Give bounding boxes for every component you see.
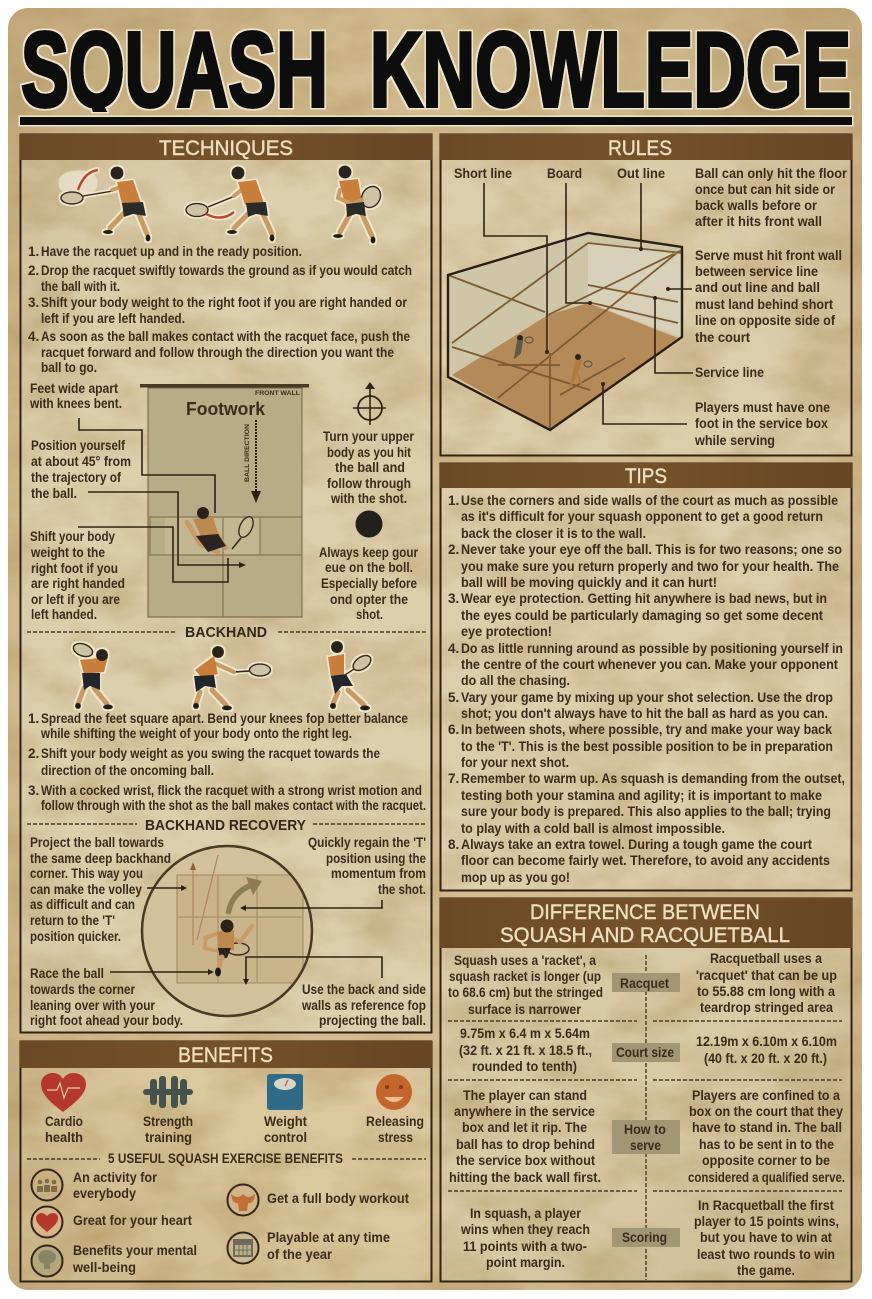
row: racquet: to 68.6 cm) but the stringed — [448, 985, 603, 1000]
row: how to serve: anywhere in the service — [454, 1104, 595, 1119]
text: tips list: you make sure you return properly and two for your health. The — [461, 559, 839, 574]
text: tips list: Do as little running around as possible by positioning yourself in — [461, 641, 843, 656]
row: scoring: 11 points with a two- — [463, 1239, 587, 1254]
text: tips list: Always take an extra towel. During a tough game the court — [461, 837, 812, 852]
row: how to serve: considered a qualified serve. — [688, 1170, 845, 1185]
text: turn upper body: the ball and — [335, 460, 405, 475]
heading: backhand: BACKHAND — [185, 625, 267, 641]
panel: rules — [440, 134, 852, 456]
heading: techniques — [20, 134, 432, 160]
text: rules descriptions: after it hits front wall — [695, 214, 822, 229]
row: scoring: wins when they reach — [460, 1222, 590, 1237]
row: how to serve — [449, 1088, 845, 1185]
row: racquet: 'racquet' that can be up — [696, 968, 837, 983]
text: rules descriptions: the court — [695, 330, 750, 345]
icon: smiling face — [376, 1074, 412, 1110]
panel: difference between squash and racquetball — [440, 898, 852, 1282]
row: court size: rounded to tenth) — [472, 1059, 577, 1074]
text: tips list: Vary your game by mixing up your shot selection. Use the drop — [461, 690, 833, 705]
text: rules descriptions: Service line — [695, 365, 764, 380]
text: tips list: 6. — [448, 722, 459, 737]
figure: backhand step 2 — [193, 646, 270, 710]
row: how to serve: Players are confined to a — [692, 1088, 840, 1103]
text: backhand steps: while shifting the weight of your body onto the right leg. — [40, 726, 352, 741]
heading: benefits — [20, 1041, 432, 1068]
heading: backhand recovery: BACKHAND RECOVERY — [145, 818, 306, 834]
text: keep eye on ball — [319, 545, 419, 622]
text: backhand steps: 1. — [28, 711, 39, 726]
text: footwork left labels: or left if you are — [31, 592, 120, 607]
text: forehand steps — [28, 244, 412, 375]
text: recovery labels: can make the volley — [30, 882, 142, 897]
text: turn upper body — [323, 429, 415, 506]
text: backhand steps: Shift your body weight as you swing the racquet towards the — [41, 746, 380, 761]
figure: backhand step 1 — [72, 641, 113, 710]
text: forehand steps: 3. — [28, 295, 39, 310]
text: forehand steps: racquet forward and follow through the direction you want the — [41, 345, 394, 360]
heading: benefits: BENEFITS — [178, 1044, 273, 1067]
figure: forehand step 2 — [186, 166, 274, 242]
text: footwork left labels: Position yourself — [31, 438, 125, 453]
text: forehand steps: ball to go. — [41, 360, 97, 375]
text: court labels: Board — [547, 166, 582, 181]
text: forehand steps: 4. — [28, 329, 39, 344]
row: scoring: the game. — [737, 1263, 795, 1278]
row: court size: (40 ft. x 20 ft. x 20 ft.) — [704, 1051, 827, 1066]
text: tips list: ball will be moving quickly and it can hurt! — [461, 575, 717, 590]
text: tips list — [448, 493, 845, 885]
text: tips list: as it's difficult for your squash opponent to get a good return — [461, 509, 823, 524]
icon: small heart — [32, 1206, 62, 1238]
text: recovery labels: position quicker. — [30, 929, 121, 944]
text: forehand steps: Shift your body weight to the right foot if you are right handed or — [41, 295, 408, 310]
icon: squash ball — [356, 510, 382, 538]
text: footwork left labels: are right handed — [31, 576, 125, 591]
text: footwork left labels: Shift your body — [30, 529, 115, 544]
row: how to serve: opposite corner to be — [702, 1153, 830, 1168]
diagram: 3D squash court — [448, 183, 693, 430]
text: backhand steps: Spread the feet square apart. Bend your knees fop better balance — [41, 711, 408, 726]
heading: rules — [440, 134, 852, 160]
text: five useful benefits: An activity for — [73, 1170, 158, 1185]
row: how to serve: box and let it rip. The — [462, 1120, 587, 1135]
text: tips list: shot; you don't always have to hit the ball as hard as you can. — [461, 706, 828, 721]
row: racquet: Racquet — [620, 976, 669, 991]
text: footwork left labels: weight to the — [30, 545, 105, 560]
text: tips list: testing both your stamina and agility; it is important to make — [461, 788, 822, 803]
text: backhand steps: direction of the oncoming ball. — [41, 763, 214, 778]
text: recovery labels: Race the ball — [30, 966, 104, 981]
text: tips list: Never take your eye off the ball. This is for two reasons; one so — [461, 542, 842, 557]
row: scoring: but you have to win at — [700, 1230, 832, 1245]
text: recovery labels: projecting the ball. — [319, 1013, 426, 1028]
text: tips list: Wear eye protection. Getting hit anywhere is bad news, but in — [461, 591, 827, 606]
text: footwork left labels: right foot if you — [31, 561, 118, 576]
text: five useful benefits: Great for your heart — [73, 1213, 192, 1228]
text: rules descriptions: Serve must hit front wall — [695, 248, 842, 263]
text: footwork left labels: Feet wide apart — [30, 381, 118, 396]
text: tips list: mop up as you go! — [461, 870, 570, 885]
text: tips list: 4. — [448, 641, 459, 656]
icon: crosshair target — [353, 382, 386, 425]
text: footwork left labels — [29, 381, 131, 622]
text: four benefits: health — [45, 1130, 83, 1145]
row: how to serve: the service box without — [456, 1153, 595, 1168]
text: rules descriptions: once but can hit side or — [695, 182, 836, 197]
row: how to serve: box on the court that they — [689, 1104, 843, 1119]
row: how to serve: serve — [630, 1138, 661, 1153]
row: scoring: Scoring — [622, 1230, 667, 1245]
text: recovery labels: return to the 'T' — [30, 913, 115, 928]
figure: forehand step 3 — [333, 166, 384, 244]
text: recovery labels: as difficult and can — [30, 897, 135, 912]
text: rules descriptions: foot in the service box — [695, 416, 828, 431]
text: turn upper body: Turn your upper — [323, 429, 415, 444]
text: forehand steps: Have the racquet up and in the ready position. — [41, 244, 302, 259]
row: racquet: squash racket is longer (up — [449, 969, 601, 984]
text: footwork left labels: with knees bent. — [29, 396, 122, 411]
text: four benefits: Weight — [264, 1114, 307, 1129]
text: four benefits: stress — [378, 1130, 413, 1145]
icon: brain — [32, 1246, 62, 1276]
text: backhand steps — [28, 711, 426, 813]
text: forehand steps: the ball with it. — [41, 279, 120, 294]
text: tips list: 7. — [448, 771, 459, 786]
diagram: footwork court: BALL DIRECTION — [245, 424, 251, 482]
text: five useful benefits: everybody — [73, 1186, 136, 1201]
diagram: footwork court — [78, 384, 309, 617]
text: tips list: for your next shot. — [461, 755, 569, 770]
figure: forehand step 1 — [60, 166, 150, 242]
row: racquet: to 55.88 cm long with a — [697, 984, 835, 999]
row: how to serve: The player can stand — [463, 1088, 587, 1103]
icon: people — [32, 1170, 62, 1200]
row: court size: 12.19m x 6.10m x 6.10m — [696, 1034, 837, 1049]
panel: benefits — [20, 1041, 432, 1282]
heading: difference: SQUASH AND RACQUETBALL — [500, 924, 790, 947]
text: forehand steps: As soon as the ball makes contact with the racquet face, push the — [41, 329, 410, 344]
icon: muscle body — [228, 1184, 258, 1216]
heading: techniques: TECHNIQUES — [159, 137, 293, 160]
title — [18, 28, 854, 126]
text: recovery labels: Use the back and side — [302, 982, 426, 997]
text: rules descriptions: Ball can only hit the floor — [695, 166, 848, 181]
diagram: recovery circle — [110, 846, 382, 1016]
text: five useful benefits: of the year — [267, 1247, 333, 1262]
row: scoring: player to 15 points wins, — [694, 1214, 839, 1229]
text: five useful benefits — [72, 1170, 409, 1275]
heading: tips — [440, 463, 852, 488]
row: scoring: point margin. — [486, 1255, 565, 1270]
text: four benefits: Releasing — [366, 1114, 424, 1129]
text: keep eye on ball: Especially before — [321, 576, 417, 591]
text: four benefits: training — [145, 1130, 192, 1145]
text: tips list: the eyes could be particularly damaging so get some decent — [461, 608, 823, 623]
text: tips list: to the 'T'. This is the best possible position to be in preparation — [461, 739, 833, 754]
row: how to serve: has to be sent in to the — [699, 1137, 834, 1152]
text: tips list: back the closer it is to the wall. — [461, 526, 646, 541]
text: forehand steps: 1. — [28, 244, 39, 259]
text: tips list: 1. — [448, 493, 459, 508]
row: how to serve: ball has to drop behind — [456, 1137, 595, 1152]
text: keep eye on ball: Always keep gour — [319, 545, 419, 560]
heading: tips: TIPS — [625, 465, 667, 488]
text: four benefits: control — [264, 1130, 307, 1145]
text: recovery labels: position using the — [326, 851, 426, 866]
row: scoring — [460, 1198, 839, 1278]
row: how to serve: How to — [624, 1122, 666, 1137]
row: scoring: In squash, a player — [470, 1206, 582, 1221]
heading: difference — [440, 898, 852, 948]
row: racquet — [448, 951, 837, 1017]
text: tips list: 8. — [448, 837, 459, 852]
text: turn upper body: follow through — [327, 476, 411, 491]
row: racquet: Racquetball uses a — [710, 951, 822, 966]
text: court labels — [454, 166, 665, 181]
text: recovery labels: leaning over with your — [30, 998, 156, 1013]
text: recovery labels — [30, 835, 426, 1028]
text: four benefits — [45, 1114, 424, 1145]
text: backhand steps: With a cocked wrist, flick the racquet with a strong wrist motion and — [41, 783, 422, 798]
text: recovery labels: the same deep backhand — [30, 851, 171, 866]
text: rules descriptions: while serving — [694, 433, 775, 448]
text: court labels: Out line — [617, 166, 665, 181]
text: rules descriptions: and out line and ball — [695, 280, 820, 295]
text: footwork left labels: the trajectory of — [31, 470, 121, 485]
text: tips list: Use the corners and side walls of the court as much as possible — [461, 493, 838, 508]
text: rules descriptions: Players must have one — [695, 400, 830, 415]
figure: court players — [514, 335, 592, 387]
text: footwork left labels: at about 45° from — [31, 454, 131, 469]
heading: difference: DIFFERENCE BETWEEN — [530, 901, 760, 924]
text: recovery labels: right foot ahead your body. — [30, 1013, 183, 1028]
text: forehand steps: left if you are left handed. — [41, 311, 185, 326]
text: five useful benefits: Playable at any time — [267, 1230, 390, 1245]
text: footwork left labels: left handed. — [31, 607, 97, 622]
text: turn upper body: body as you hit — [327, 445, 411, 460]
text: backhand steps: 2. — [28, 746, 39, 761]
text: keep eye on ball: shot. — [356, 607, 383, 622]
text: tips list: to play with a cold ball is almost impossible. — [461, 821, 725, 836]
text: rules descriptions: must land behind short — [695, 297, 833, 312]
text: rules descriptions: between service line — [695, 264, 818, 279]
text: tips list: do all the chasing. — [461, 673, 570, 688]
row: court size: Court size — [616, 1045, 674, 1060]
text: tips list: Remember to warm up. As squash is demanding from the outset, — [461, 771, 845, 786]
row: court size: 9.75m x 6.4 m x 5.64m — [460, 1026, 590, 1041]
row: how to serve: hitting the back wall first. — [449, 1170, 601, 1185]
row: scoring: least two rounds to win — [697, 1247, 835, 1262]
text: forehand steps: 2. — [28, 263, 39, 278]
text: recovery labels: momentum from — [331, 866, 426, 881]
row: racquet: Squash uses a 'racket', a — [454, 953, 596, 968]
figure: recovery player from above — [204, 920, 252, 976]
text: rules descriptions — [694, 166, 848, 448]
text: four benefits: Strength — [143, 1114, 193, 1129]
text: turn upper body: with the shot. — [330, 491, 407, 506]
text: tips list: 2. — [448, 542, 459, 557]
text: backhand steps: 3. — [28, 783, 39, 798]
figure: footwork player from above — [187, 507, 256, 552]
text: recovery labels: towards the corner — [30, 982, 136, 997]
text: tips list: floor can become fairly wet. Therefore, to avoid any accidents — [461, 853, 830, 868]
text: forehand steps: Drop the racquet swiftly towards the ground as if you would catch — [41, 263, 412, 278]
text: recovery labels: the shot. — [378, 882, 426, 897]
row: court size — [459, 1026, 837, 1074]
icon: heart — [41, 1073, 86, 1112]
text: tips list: 3. — [448, 591, 459, 606]
text: keep eye on ball: ond opter the — [330, 592, 408, 607]
text: rules descriptions: back walls before or — [695, 198, 818, 213]
panel: tips — [440, 463, 852, 890]
text: tips list: sure your body is prepared. This also applies to the ball; trying — [461, 804, 831, 819]
heading: 5 useful benefits: 5 USEFUL SQUASH EXERCISE BENEFITS — [108, 1151, 343, 1166]
text: keep eye on ball: eue on the boll. — [325, 560, 413, 575]
diagram: footwork court: Footwork — [186, 399, 266, 419]
text: backhand steps: follow through with the shot as the ball makes contact with the racquet. — [41, 798, 426, 813]
row: racquet: surface is narrower — [468, 1002, 582, 1017]
title: SQUASH — [21, 11, 328, 129]
icon: weight scale — [267, 1074, 303, 1110]
icon: calendar — [228, 1232, 258, 1264]
panel: techniques — [20, 134, 432, 1032]
text: recovery labels: walls as reference fop — [301, 998, 426, 1013]
text: tips list: 5. — [448, 690, 459, 705]
text: five useful benefits: Benefits your mental — [73, 1243, 197, 1258]
row: racquet: teardrop stringed area — [700, 1000, 833, 1015]
row: court size: (32 ft. x 21 ft. x 18.5 ft., — [459, 1043, 592, 1058]
figure: backhand step 3 — [328, 641, 374, 710]
row: how to serve: have to stand in. The ball — [692, 1120, 842, 1135]
text: footwork left labels: the ball. — [31, 486, 77, 501]
text: tips list: the centre of the court whenever you can. Make your opponent — [461, 657, 838, 672]
text: recovery labels: Project the ball towards — [30, 835, 164, 850]
diagram: footwork court: FRONT WALL — [255, 391, 300, 397]
text: tips list: In between shots, where possible, try and make your way back — [461, 722, 832, 737]
text: four benefits: Cardio — [45, 1114, 83, 1129]
icon: dumbbell — [143, 1076, 193, 1108]
row: scoring: In Racquetball the first — [698, 1198, 834, 1213]
text: court labels: Short line — [454, 166, 512, 181]
text: recovery labels: Quickly regain the 'T' — [308, 835, 426, 850]
text: recovery labels: corner. This way you — [30, 866, 143, 881]
heading: rules: RULES — [608, 137, 672, 160]
text: rules descriptions: line on opposite side of — [695, 313, 835, 328]
text: tips list: eye protection! — [461, 624, 552, 639]
text: five useful benefits: Get a full body workout — [267, 1191, 409, 1206]
text: five useful benefits: well-being — [72, 1260, 136, 1275]
